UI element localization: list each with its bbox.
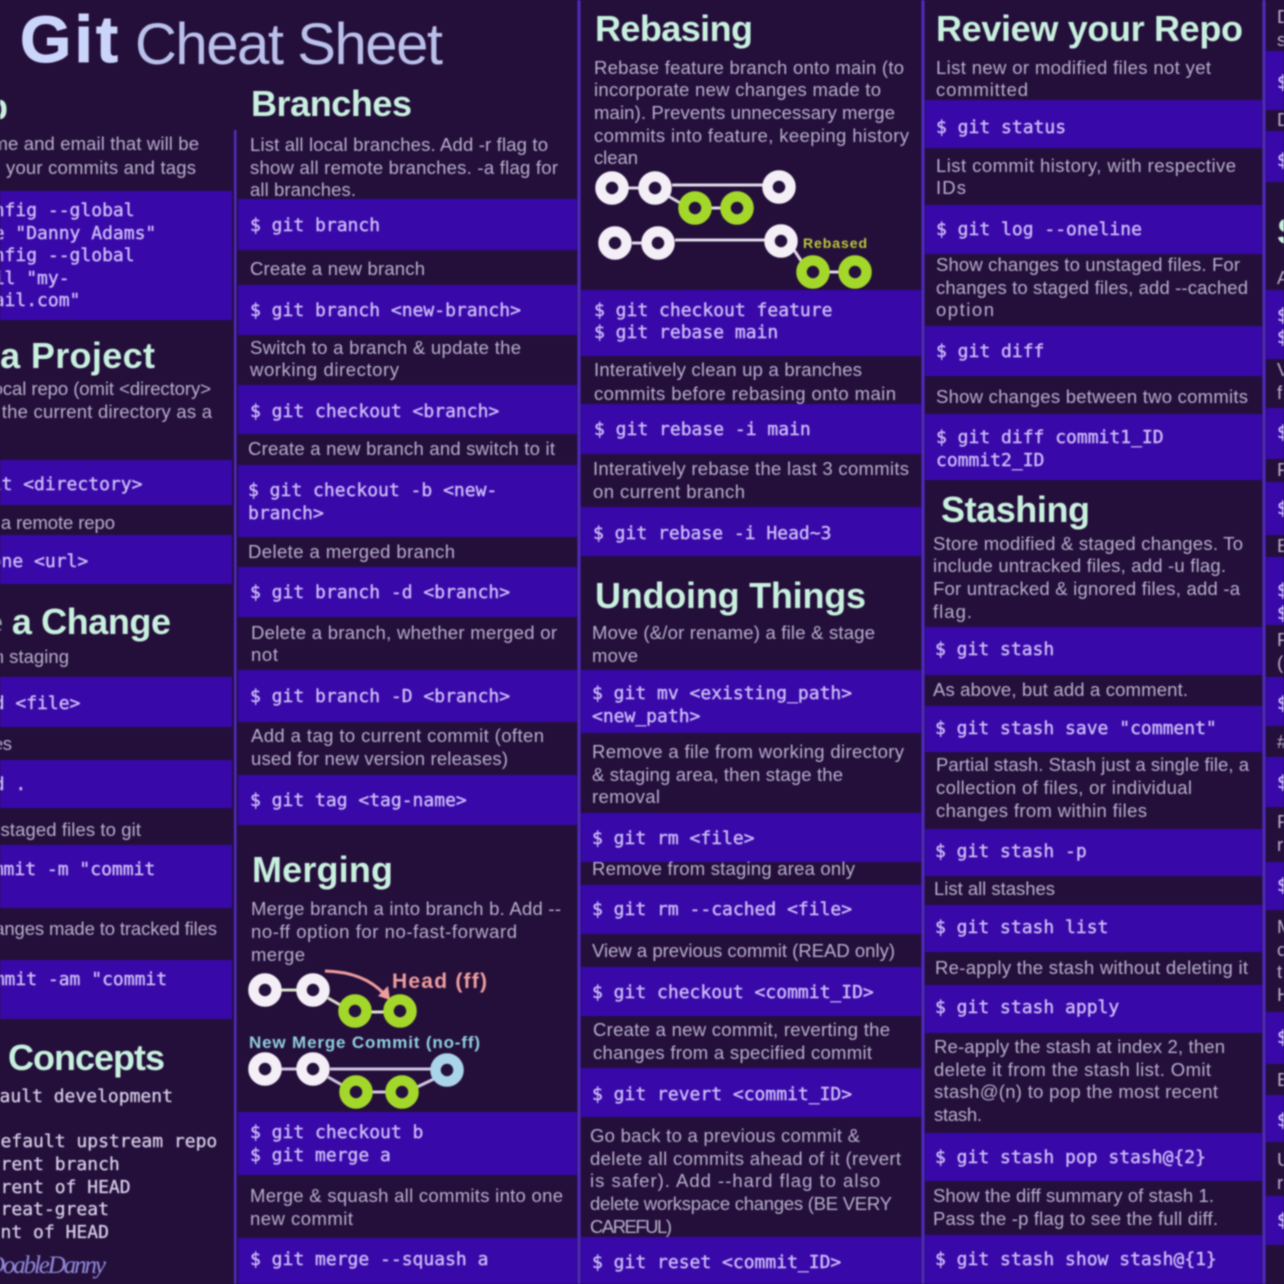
cropped text fragments: r [1277,1172,1283,1193]
description: switch branch: working directory [249,359,400,380]
title: Cheat Sheet [135,12,443,77]
description: delete any [251,622,557,665]
description: remove: removal [592,786,660,807]
description: stash show [933,1185,1218,1229]
description: partial stash: changes from within files [936,800,1147,821]
command: branch -D: $ git branch -D <branch> [250,686,510,707]
panel: stashing [925,489,1262,1284]
command: stash -p: $ git stash -p [935,841,1087,862]
command: checkout -b [248,480,497,524]
command: git mv: <new_path> [592,706,701,727]
command: git mv [592,683,852,727]
command: checkout and merge: $ git merge a [250,1145,391,1166]
panel: rebasing [581,8,921,556]
description: reset [590,1125,901,1237]
diagram: fast-forward merge: Head (ff) [392,970,487,993]
description: log: IDs [936,177,966,198]
heading: concepts: Concepts [8,1037,165,1078]
cropped text fragments: f [1277,382,1283,403]
title: Git [20,2,118,76]
command: checkout and merge: $ git checkout b [250,1122,423,1143]
description: list stashes: List all stashes [934,878,1055,899]
command: git reset: $ git reset <commit_ID> [592,1252,841,1273]
description: store changes: flag. [933,601,972,622]
description: interactive clean: Interatively clean up a branches [594,359,862,380]
description: pop: stash. [934,1104,982,1125]
description: switch branch: Switch to a branch & update the [250,337,521,358]
command: checkout -b: branch> [248,503,324,524]
description: switch branch [249,337,521,380]
description: move: move [592,645,638,666]
cropped text fragments: r [1277,834,1283,855]
description: store changes: include untracked files, add -u flag. [933,555,1226,576]
description: partial stash [936,754,1250,821]
description: reset: is safer). Add --hard flag to also [590,1170,880,1191]
description: reset: delete all commits ahead of it (revert [590,1148,901,1169]
description: pop: Re-apply the stash at index 2, then [934,1036,1225,1057]
command: stash pop: $ git stash pop stash@{2} [935,1147,1206,1168]
command: git revert: $ git revert <commit_ID> [592,1084,852,1105]
command: git config [0,200,156,311]
description: add tag: used for new version releases) [251,748,508,769]
heading: merging: Merging [252,849,393,890]
description: merge [251,898,561,965]
description: diff: Show changes to unstaged files. For [936,254,1240,275]
description: diff: changes to staged files, add --cached [936,277,1248,298]
description: list branches: all branches. [250,179,356,200]
description: store changes [933,533,1243,622]
description: list branches: show all remote branches. -a flag for [250,157,558,178]
command: checkout and rebase: $ git checkout feature [594,300,832,321]
command: checkout and merge [250,1122,423,1166]
command: merge squash: $ git merge --squash a [250,1249,488,1270]
cropped text fragments [1277,6,1284,1231]
heading: stashing: Stashing [941,489,1090,530]
command: git diff: $ git diff [936,341,1044,362]
description: rebase: main). Prevents unnecessary merge [594,102,895,123]
heading: review your repo: Review your Repo [936,8,1243,49]
command: new branch: $ git branch <new-branch> [250,300,521,321]
command: stash apply: $ git stash apply [935,997,1119,1018]
description: rebase: commits into feature, keeping history [594,125,910,146]
description: interactive last 3 [593,458,909,502]
description: status [936,57,1211,100]
command: checkout: $ git checkout <branch> [250,401,499,422]
diagram: before rebase [600,176,790,220]
description: rebase [594,57,910,168]
description: remove: Remove a file from working directory [592,741,905,762]
description: stash show: Show the diff summary of stash 1. [933,1185,1214,1206]
description: add tag: Add a tag to current commit (often [251,725,544,746]
panel: make a change [0,601,232,1019]
heading: undoing things: Undoing Things [595,575,866,616]
description: view previous: View a previous commit (READ only) [592,940,895,961]
cropped text fragments: t [1277,961,1282,982]
description: list branches: List all local branches. Add -r flag to [250,134,548,155]
description: move: Move (&/or rename) a file & stage [592,622,875,643]
description: remove staging: Remove from staging area only [592,858,856,879]
command: git rm cached: $ git rm --cached <file> [592,899,852,920]
description: store changes: Store modified & staged changes. To [933,533,1243,554]
command: git tag: $ git tag <tag-name> [250,790,467,811]
command: git log: $ git log --oneline [936,219,1142,240]
description: merge: no-ff option for no-fast-forward [251,921,517,942]
panel: branches [238,83,577,825]
description: remove: & staging area, then stage the [592,764,843,785]
description: delete merged: Delete a merged branch [248,541,455,562]
description: reset: delete workspace changes (BE VERY [590,1193,892,1214]
diagram: fast-forward merge [254,970,487,1022]
diagram: after rebase: Rebased [803,235,867,251]
command: branch -d: $ git branch -d <branch> [250,582,510,603]
description: status: List new or modified files not yet [936,57,1211,78]
panel: cropped right column [1266,6,1284,1245]
description: interactive last 3: Interatively rebase the last 3 commits [593,458,909,479]
description: merge: Merge branch a into branch b. Add -- [251,898,561,919]
description: diff [936,254,1248,320]
description: revert [593,1019,890,1063]
command: git mv: $ git mv <existing_path> [592,683,852,704]
command: stash show: $ git stash show stash@{1} [935,1249,1217,1270]
command: stash save: $ git stash save "comment" [935,718,1217,739]
command: rebase -i main: $ git rebase -i main [594,419,811,440]
command: git diff commits: commit2_ID [936,450,1044,471]
description: rebase: incorporate new changes made to [594,79,881,100]
description: list branches [250,134,558,200]
description: delete any: Delete a branch, whether merged or [251,622,557,643]
description: diff two commits: Show changes between two commits [936,386,1248,407]
description: log: List commit history, with respective [936,155,1236,176]
description: log [936,155,1236,198]
description: reset: CAREFUL) [590,1216,672,1237]
panel: start a project [0,335,232,584]
command: git diff commits: $ git diff commit1_ID [936,427,1164,448]
description: remove [592,741,905,807]
command: checkout -b: $ git checkout -b <new- [248,480,497,501]
glossary list [0,1086,217,1243]
description: merge: merge [251,944,305,965]
description: partial stash: collection of files, or individual [936,777,1192,798]
command: checkout and rebase [594,300,832,343]
panel: setup [0,86,232,320]
description: interactive last 3: on current branch [593,481,745,502]
description: move [592,622,875,666]
description: delete any: not [251,644,278,665]
description: create a local repo [0,378,213,422]
description: stash show: Pass the -p flag to see the full diff. [933,1208,1218,1229]
description: revert: changes from a specified commit [593,1042,872,1063]
cropped text fragments: ( [1277,652,1284,673]
description: pop [934,1036,1225,1125]
description: rebase: Rebase feature branch onto main (to [594,57,904,78]
command: stash list: $ git stash list [935,917,1108,938]
diagram: no-fast-forward merge: New Merge Commit (no-ff) [249,1033,480,1052]
description: squash: Merge & squash all commits into one [250,1185,563,1206]
command: git diff commits [936,427,1164,471]
command: git status: $ git status [936,117,1066,138]
description: squash: new commit [250,1208,353,1229]
heading: branches: Branches [251,83,412,124]
description: partial stash: Partial stash. Stash just a single file, a [936,754,1250,775]
title [20,2,443,77]
panel: undoing things [581,575,921,1284]
panel: concepts [0,1037,217,1279]
description: pop: stash@(n) to pop the most recent [934,1081,1218,1102]
description: set name and email [0,133,199,178]
description: revert: Create a new commit, reverting the [593,1019,890,1040]
description: rebase: clean [594,147,638,168]
description: create and switch: Create a new branch and switch to it [248,438,555,459]
description: pop: delete it from the stash list. Omit [934,1059,1211,1080]
command: git rm: $ git rm <file> [592,828,755,849]
diagram: after rebase [604,230,867,284]
description: interactive clean: commits before rebasing onto main [594,383,896,404]
diagram: no-fast-forward merge [249,1033,480,1104]
description: reset: Go back to a previous commit & [590,1125,861,1146]
description: diff: option [936,299,994,320]
panel: merging [238,849,577,1284]
description: store changes: For untracked & ignored files, add -a [933,578,1241,599]
command: checkout and rebase: $ git rebase main [594,322,778,343]
description: interactive clean [594,359,896,404]
description: reapply: Re-apply the stash without deleting it [935,957,1248,978]
command: checkout commit: $ git checkout <commit_ID> [592,982,874,1003]
description: status: committed [936,79,1028,100]
description: add tag [251,725,544,769]
command: git stash: $ git stash [935,639,1054,660]
panel: review your repo [925,8,1262,480]
command: git branch: $ git branch [250,215,380,236]
command: rebase head: $ git rebase -i Head~3 [593,523,831,544]
description: squash [250,1185,563,1229]
heading: rebasing: Rebasing [595,8,753,49]
description: comment: As above, but add a comment. [933,679,1188,700]
description: new branch: Create a new branch [250,258,425,279]
